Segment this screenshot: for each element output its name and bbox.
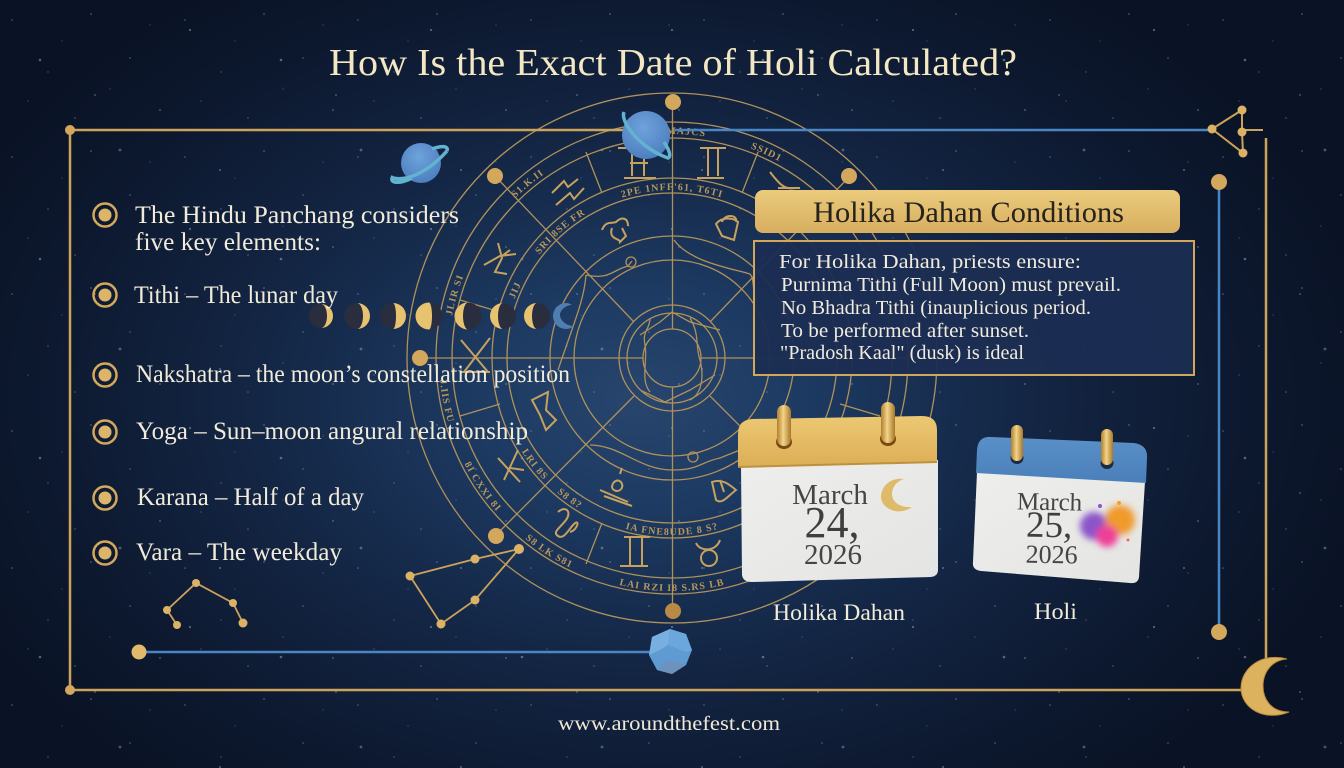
bullet 6 bbox=[94, 542, 116, 564]
calendar: march 24: 2026 bbox=[804, 539, 862, 571]
wheel band inscriptions: S8 LK S81 bbox=[526, 534, 572, 568]
zodiac glyph: gemini top right bbox=[697, 148, 726, 178]
conditions intro: For Holika Dahan, priests ensure: bbox=[779, 251, 1081, 273]
condition 1: Purnima Tithi (Full Moon) must prevail. bbox=[781, 274, 1121, 296]
moon phase 2 bbox=[344, 303, 370, 329]
panel: five elements list bbox=[94, 202, 570, 566]
calendar: march 24: 24, bbox=[804, 498, 860, 547]
panel: holika dahan conditions bbox=[754, 241, 1194, 375]
title: How Is the Exact Date of Holi Calculated? bbox=[329, 42, 1017, 84]
icon: blue polyhedron bbox=[649, 629, 692, 674]
bullet 3 bbox=[94, 364, 116, 386]
bullet 4 bbox=[94, 420, 116, 444]
label: holika dahan: Holika Dahan bbox=[773, 600, 905, 625]
icon: crescent on calendar bbox=[881, 479, 912, 511]
outer frame bbox=[65, 125, 1266, 695]
zodiac glyph: taurus bbox=[696, 540, 720, 566]
calendar ring right bbox=[880, 402, 896, 446]
wheel band inscriptions: MAJCS bbox=[668, 127, 704, 136]
zodiac glyph: gemini bottom bbox=[620, 537, 650, 566]
condition 4: "Pradosh Kaal" (dusk) is ideal bbox=[780, 342, 1024, 364]
panel: holika dahan header bbox=[755, 190, 1180, 233]
moon phases bbox=[309, 302, 574, 330]
bullet 2 bbox=[94, 284, 116, 306]
bullet 1 bbox=[94, 204, 116, 226]
item: nakshatra: Nakshatra – the moon’s constellation position bbox=[136, 361, 570, 388]
calendar: march 25: 25, bbox=[1026, 505, 1073, 546]
wheel band inscriptions: SSID1 bbox=[751, 142, 781, 161]
zodiac glyph: map shape bbox=[532, 392, 556, 430]
item: tithi: Tithi – The lunar day bbox=[134, 282, 338, 309]
center bottom constellation bbox=[406, 544, 524, 628]
item: vara: Vara – The weekday bbox=[136, 539, 343, 566]
wheel band inscriptions: LRI 8S bbox=[522, 448, 548, 479]
calendar: march 25 bbox=[973, 425, 1147, 583]
top right constellation bbox=[1208, 106, 1263, 158]
calendar: march 25: March bbox=[1017, 488, 1083, 517]
bottom blue connector bbox=[132, 644, 652, 660]
wheel band inscriptions: JLIR SI bbox=[446, 274, 464, 316]
icon: colour powder splash bbox=[1080, 501, 1135, 547]
label: holi: Holi bbox=[1034, 599, 1077, 624]
zodiac glyph: scorpio bbox=[770, 172, 800, 188]
wheel band inscriptions: 2PE 1NFF'61, T6TI bbox=[620, 183, 723, 198]
zodiac glyph: gemini top left bbox=[618, 148, 660, 178]
wheel band inscriptions: 8I CXXI 8I bbox=[465, 462, 502, 512]
calendar: march 24: March bbox=[792, 479, 868, 511]
icon: planet on frame bbox=[622, 111, 670, 159]
zodiac glyph: cancer inner left bbox=[602, 219, 628, 242]
item: karana: Karana – Half of a day bbox=[137, 484, 364, 511]
zodiac glyph: leo bbox=[556, 509, 577, 537]
moon phase 4 bbox=[416, 302, 442, 330]
right blue connector bbox=[1211, 174, 1227, 640]
panel: holika dahan header: Holika Dahan Conditions bbox=[813, 196, 1124, 229]
wheel band inscriptions: IA FNE8UDE 8 S? bbox=[626, 522, 716, 535]
calendar ring left bbox=[776, 405, 792, 449]
website footer: www.aroundthefest.com bbox=[558, 713, 781, 735]
zodiac glyph: cancer right bbox=[712, 480, 736, 501]
zodiac wheel bbox=[407, 93, 938, 623]
condition 2: No Bhadra Tithi (inauplicious period. bbox=[781, 297, 1091, 319]
wheel band inscriptions: S8 8? bbox=[558, 488, 582, 508]
intro text: five key elements: bbox=[135, 229, 321, 256]
intro text: The Hindu Panchang considers bbox=[135, 202, 459, 229]
moon phase 3 bbox=[380, 303, 406, 329]
wheel band inscriptions: J.IIS FU bbox=[440, 380, 454, 421]
zodiac glyph: virgo inner right bbox=[716, 216, 738, 240]
zodiac glyph: pisces bbox=[484, 243, 516, 274]
moon phase 7 bbox=[524, 303, 550, 329]
item: yoga: Yoga – Sun–moon angural relationship bbox=[136, 418, 528, 445]
zodiac glyph: libra bbox=[600, 468, 632, 506]
wheel band inscriptions: SRI 8SE FR bbox=[536, 210, 586, 254]
calendar: march 25: 2026 bbox=[1025, 540, 1078, 570]
moon phase 1 bbox=[309, 304, 333, 328]
bullet 5 bbox=[94, 486, 116, 510]
condition 3: To be performed after sunset. bbox=[781, 320, 1029, 342]
icon: gold crescent moon bbox=[1241, 657, 1289, 715]
intro text bbox=[135, 202, 459, 256]
moon phase 6 bbox=[490, 303, 516, 329]
wheel band inscriptions bbox=[440, 127, 781, 592]
icon: planet left bbox=[392, 143, 447, 183]
wheel band inscriptions: S1.K.II bbox=[512, 170, 544, 198]
calendar: march 24 bbox=[738, 402, 938, 582]
bottom left constellation bbox=[163, 579, 248, 629]
moon phase 5 bbox=[454, 302, 482, 330]
wheel nodes bbox=[412, 94, 857, 619]
wheel band inscriptions: JIJ bbox=[509, 282, 520, 299]
zodiac glyph: sagittarius bbox=[498, 450, 524, 482]
wheel band inscriptions: LAI RZI I8 S.RS LB bbox=[619, 578, 724, 592]
zodiac glyph: aquarius bbox=[552, 179, 584, 205]
calendar ring left bbox=[1010, 425, 1024, 464]
moon phase 8 blue bbox=[553, 303, 574, 329]
calendar ring right bbox=[1100, 429, 1114, 469]
zodiac glyph: aries bbox=[461, 338, 490, 372]
